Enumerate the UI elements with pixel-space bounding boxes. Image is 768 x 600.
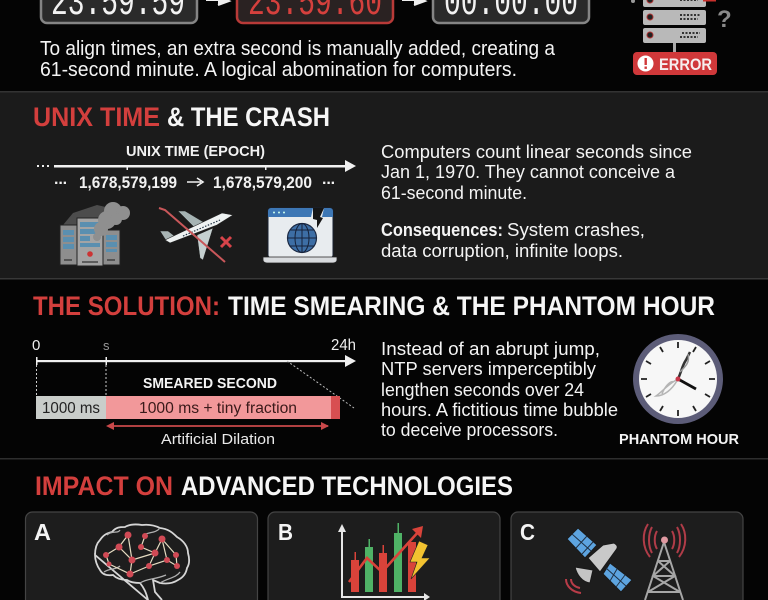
icon: server error: ERROR <box>659 55 712 74</box>
icon: grounded plane <box>159 208 233 262</box>
panel: time smearing <box>0 291 768 460</box>
icon: broken laptop <box>263 208 337 263</box>
icon: server error: ? <box>717 6 732 33</box>
explanation text <box>381 339 618 440</box>
timeline: epoch: UNIX TIME (EPOCH) <box>126 143 265 160</box>
heading: & THE CRASH <box>167 102 330 132</box>
icon: phantom hour clock <box>619 337 739 448</box>
panel: unix time and the crash <box>0 91 768 280</box>
diagram: smeared second: 24h <box>331 337 356 354</box>
icon: phantom hour clock: PHANTOM HOUR <box>619 431 739 448</box>
explanation text: System crashes, <box>507 220 645 240</box>
diagram: smeared second: s <box>103 338 110 353</box>
card C: satellite and tower <box>511 512 743 600</box>
diagram: smeared second: 1000 ms <box>42 400 100 417</box>
card C: satellite and tower: C <box>520 519 535 545</box>
explanation text: Instead of an abrupt jump, <box>381 339 600 359</box>
timeline: epoch: ··· <box>322 175 336 192</box>
heading: TIME SMEARING & THE PHANTOM HOUR <box>228 291 715 321</box>
description: 61-second minute. A logical abomination for computers. <box>40 59 517 81</box>
description <box>40 38 556 81</box>
panel: impact on advanced technologies <box>26 471 743 600</box>
heading: IMPACT ON <box>35 471 173 501</box>
icon: server error <box>631 0 732 75</box>
timeline: epoch: 1,678,579,200 <box>213 173 312 192</box>
explanation text: hours. A fictitious time bubble <box>381 400 618 420</box>
diagram: smeared second: Artificial Dilation <box>161 431 275 448</box>
panel: leap second <box>40 0 732 81</box>
description: To align times, an extra second is manually added, creating a <box>40 38 556 60</box>
arrow <box>402 0 425 5</box>
explanation text: 61-second minute. <box>381 183 527 203</box>
explanation text: lengthen seconds over 24 <box>381 380 584 400</box>
timeline: epoch <box>37 143 356 192</box>
diagram: smeared second: 0 <box>32 337 40 354</box>
explanation text: data corruption, infinite loops. <box>381 241 623 261</box>
explanation text: Computers count linear seconds since <box>381 142 692 162</box>
card A: brain <box>26 512 258 600</box>
diagram: smeared second: 1000 ms + tiny fraction <box>139 400 297 417</box>
heading: UNIX TIME <box>33 102 160 132</box>
diagram: smeared second: SMEARED SECOND <box>143 375 277 392</box>
explanation text: Jan 1, 1970. They cannot conceive a <box>381 162 676 182</box>
timeline: epoch: 1,678,579,199 <box>79 173 177 192</box>
explanation text: to deceive processors. <box>381 420 558 440</box>
timeline: epoch: ··· <box>54 175 68 192</box>
explanation text: NTP servers imperceptibly <box>381 359 596 379</box>
explanation text: Consequences: <box>381 220 503 240</box>
heading: ADVANCED TECHNOLOGIES <box>181 471 513 501</box>
card A: brain: A <box>34 519 51 545</box>
icon: burning servers <box>60 202 130 266</box>
explanation text <box>381 142 692 261</box>
heading: THE SOLUTION: <box>33 291 220 321</box>
card B: market chart: B <box>278 519 293 545</box>
arrow <box>206 0 229 5</box>
card B: market chart <box>268 512 500 600</box>
diagram: smeared second <box>32 337 356 448</box>
